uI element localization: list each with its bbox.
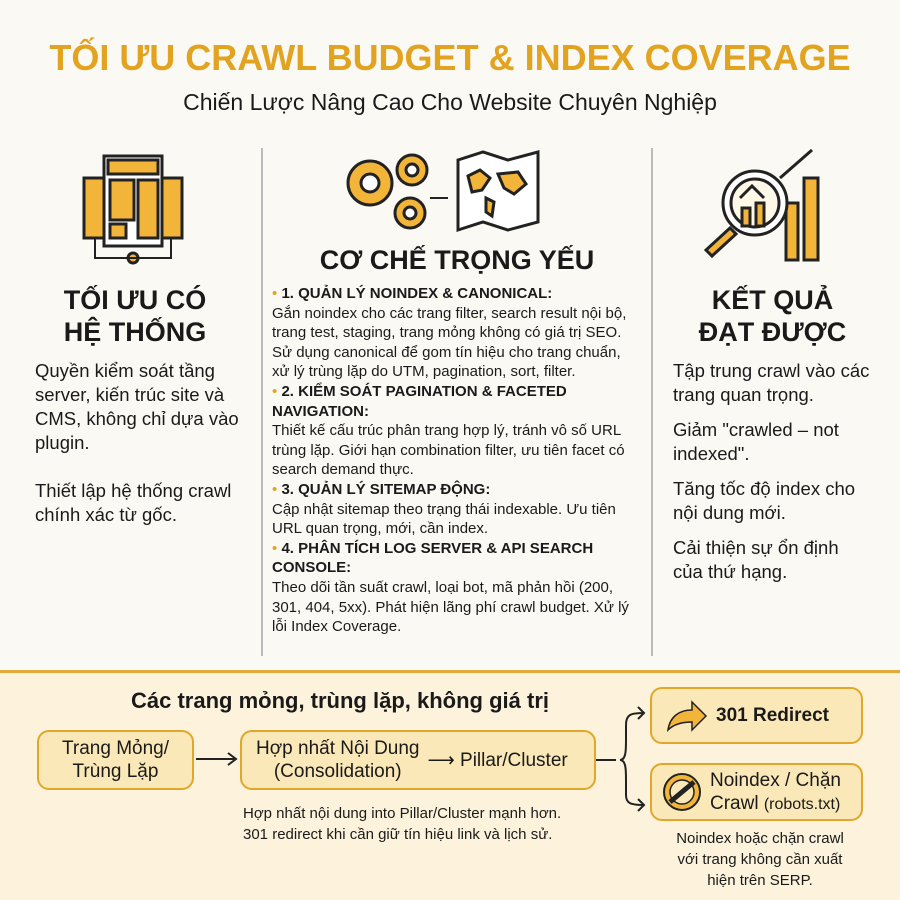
box: 301 redirect: 301 Redirect bbox=[716, 705, 829, 726]
box: consolidation: ⟶ Pillar/Cluster bbox=[428, 750, 568, 770]
box: consolidation: Hợp nhất Nội Dung bbox=[256, 738, 420, 759]
heading: right bbox=[698, 285, 846, 347]
box: consolidation bbox=[240, 730, 596, 790]
box: 301 redirect bbox=[650, 687, 863, 744]
text: left: Quyền kiểm soát tầng server, kiến trúc site và CMS, không chỉ dựa vào plugin. bbox=[35, 360, 239, 453]
text: left: Thiết lập hệ thống crawl chính xác từ gốc. bbox=[35, 480, 231, 525]
text: consolidation note: 301 redirect khi cần giữ tín hiệu link và lịch sử. bbox=[243, 826, 552, 843]
text: middle: Theo dõi tần suất crawl, loại bot, mã phản hồi (200, 301, 404, 5xx). Phát hiện lãng phí crawl budget. Xử lý lỗi Index Coverage. bbox=[272, 579, 629, 635]
text: right: Tập trung crawl vào các trang quan trọng. Giảm "crawled – not indexed". Tăng tốc độ index cho nội dung mới. Cải thiện sự ổn định của thứ hạng. bbox=[673, 360, 869, 582]
text: middle: • 3. QUẢN LÝ SITEMAP ĐỘNG: bbox=[272, 481, 490, 498]
text: middle: • 2. KIỂM SOÁT PAGINATION & FACETED NAVIGATION: bbox=[272, 383, 567, 420]
text: noindex note: với trang không cần xuất bbox=[678, 851, 842, 868]
arrow bbox=[196, 752, 238, 766]
icon: magnifier chart bbox=[704, 149, 820, 262]
branching arrows bbox=[596, 706, 646, 812]
heading: left bbox=[64, 285, 206, 347]
bottom title: Các trang mỏng, trùng lặp, không giá trị bbox=[131, 688, 549, 713]
box: consolidation: (Consolidation) bbox=[274, 761, 402, 782]
text: noindex note bbox=[676, 830, 844, 889]
text: middle: Gắn noindex cho các trang filter, search result nội bộ, trang test, staging, trang mỏng không có giá trị SEO. Sử dụng canonical để gom tín hiệu cho trang chuẩn, xử lý trùng lặp do UTM, pagination, sort, filter. bbox=[272, 305, 626, 380]
box: thin pages: Trang Mỏng/ bbox=[62, 738, 169, 759]
icon: gears and map bbox=[346, 150, 540, 232]
box: thin pages bbox=[37, 730, 194, 790]
text: noindex note: hiện trên SERP. bbox=[707, 872, 813, 889]
text: middle bbox=[272, 284, 629, 635]
heading: middle: CƠ CHẾ TRỌNG YẾU bbox=[320, 245, 594, 275]
title: TỐI ƯU CRAWL BUDGET & INDEX COVERAGE bbox=[49, 37, 851, 78]
box: thin pages: Trùng Lặp bbox=[73, 761, 158, 782]
box: noindex bbox=[650, 763, 863, 821]
box: noindex: Crawl (robots.txt) bbox=[710, 792, 840, 814]
subtitle: Chiến Lược Nâng Cao Cho Website Chuyên Nghiệp bbox=[183, 89, 717, 115]
heading: right: KẾT QUẢ bbox=[712, 285, 833, 315]
text: consolidation note: Hợp nhất nội dung into Pillar/Cluster mạnh hơn. bbox=[243, 805, 561, 822]
box: noindex: Noindex / Chặn bbox=[710, 770, 841, 790]
text: middle: Cập nhật sitemap theo trạng thái indexable. Ưu tiên URL quan trọng, mới, cần index. bbox=[272, 501, 616, 537]
heading: left: TỐI ƯU CÓ bbox=[64, 285, 206, 315]
text: middle: • 4. PHÂN TÍCH LOG SERVER & API SEARCH CONSOLE: bbox=[272, 540, 593, 576]
text: left bbox=[35, 360, 239, 525]
text: middle: • 1. QUẢN LÝ NOINDEX & CANONICAL: bbox=[272, 285, 552, 302]
text: consolidation note bbox=[243, 805, 561, 843]
heading: right: ĐẠT ĐƯỢC bbox=[699, 317, 846, 347]
icon: server bbox=[82, 154, 184, 264]
bottom panel bbox=[0, 670, 900, 900]
text: noindex note: Noindex hoặc chặn crawl bbox=[676, 830, 844, 847]
heading: left: HỆ THỐNG bbox=[64, 317, 206, 347]
text: middle: Thiết kế cấu trúc phân trang hợp lý, tránh vô số URL trùng lặp. Giới hạn combination filter, ưu tiên facet có search demand thực. bbox=[272, 422, 625, 478]
